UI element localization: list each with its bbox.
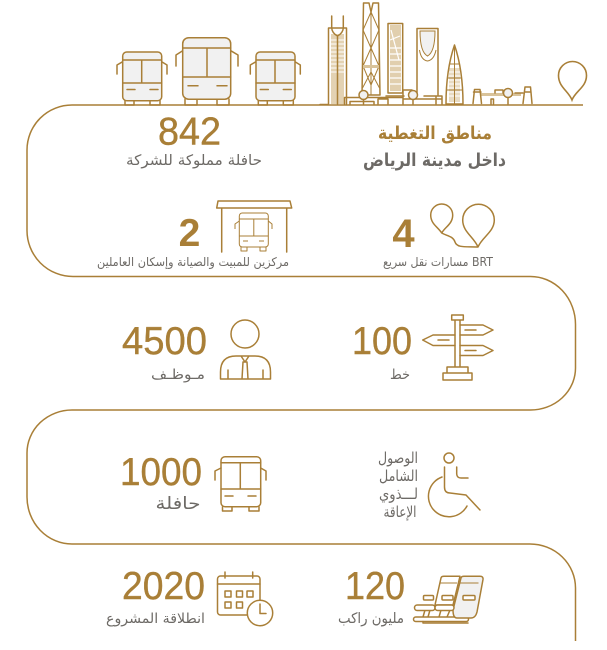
tower two lattice xyxy=(362,3,380,95)
stat: 100 lines: 100 xyxy=(352,320,412,363)
icon: two connected pins xyxy=(431,204,494,247)
tower four Kingdom Centre xyxy=(417,28,438,95)
stat: 842 owned buses xyxy=(126,110,262,169)
stat: 4500 employees xyxy=(122,320,207,383)
winding route line xyxy=(27,105,583,641)
left seat back xyxy=(435,576,460,605)
stat: 1000 buses: 1000 xyxy=(120,451,202,494)
icon: Riyadh skyline xyxy=(320,3,532,104)
stat: 120 million passengers: مليون راكب xyxy=(338,611,404,627)
text: inclusive access for people with disabilities: لـــذوي xyxy=(379,485,418,504)
stat: 4 BRT routes xyxy=(383,212,494,270)
icon: bus shelter xyxy=(217,201,292,252)
icon: location pin xyxy=(558,62,586,100)
icon: centre large bus xyxy=(176,38,238,105)
icon: calendar with clock xyxy=(218,572,273,626)
stat: 4 BRT routes: 4 xyxy=(392,212,415,256)
heading: coverage areas: مناطق التغطية xyxy=(378,123,492,144)
stat: 100 lines xyxy=(352,320,412,383)
right fort buildings xyxy=(473,87,532,104)
icon: left small bus xyxy=(117,52,167,105)
seat cushions xyxy=(414,605,454,610)
stat: 2020 project launch xyxy=(106,565,205,627)
armrests xyxy=(424,596,475,600)
icon: right small bus xyxy=(250,52,300,105)
icon: signpost xyxy=(423,315,493,380)
stat: 120 million passengers: 120 xyxy=(345,565,405,608)
stat: 2020 project launch: انطلاقة المشروع xyxy=(106,611,205,627)
stat: 2 depots: 2 xyxy=(179,212,200,255)
tower three textured xyxy=(386,24,404,96)
stat: 1000 buses xyxy=(120,451,202,514)
icon: front-view bus xyxy=(215,457,266,511)
icon: employee person xyxy=(220,320,270,379)
icon: passenger seats xyxy=(414,576,483,623)
icon: accessibility wheelchair xyxy=(428,453,480,517)
stat: 4500 employees: 4500 xyxy=(122,320,207,363)
heading: coverage areas xyxy=(363,123,506,171)
text: inclusive access for people with disabilities xyxy=(378,449,418,521)
stat: 100 lines: خط xyxy=(390,367,410,383)
icon: three buses on the road xyxy=(117,38,300,105)
text: inclusive access for people with disabilities: الوصول xyxy=(378,449,418,467)
stat: 2 depots: مركزين للمبيت والصيانة وإسكان العاملين xyxy=(97,255,289,270)
stat: 4500 employees: مـوظـف xyxy=(151,367,205,383)
text: inclusive access for people with disabilities: الإعاقة xyxy=(384,503,416,521)
stat: 1000 buses: حافلة xyxy=(156,494,200,514)
stat: 842 owned buses: حافلة مملوكة للشركة xyxy=(126,153,262,169)
stat: 120 million passengers xyxy=(338,565,405,627)
tower one xyxy=(328,16,346,104)
stat: 842 owned buses: 842 xyxy=(158,110,221,154)
text: inclusive access for people with disabilities: الشامل xyxy=(379,467,418,485)
right seat xyxy=(453,576,483,618)
stat: 2 depots xyxy=(97,212,289,270)
low buildings and trees xyxy=(320,90,442,104)
stat: 4 BRT routes: مسارات نقل سريع BRT xyxy=(383,255,494,270)
heading: coverage areas: داخل مدينة الرياض xyxy=(363,150,506,171)
seat base and legs xyxy=(414,610,468,623)
tower five pointed xyxy=(446,45,463,104)
stat: 2020 project launch: 2020 xyxy=(122,565,205,608)
